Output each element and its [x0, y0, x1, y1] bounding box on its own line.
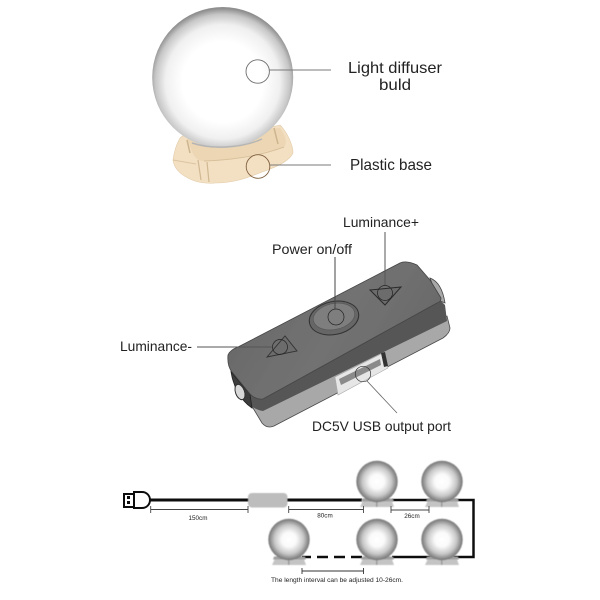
- label: DC5V USB output port: DC5V USB output port: [312, 418, 451, 434]
- label: Plastic base: Plastic base: [350, 157, 432, 174]
- wiring diagram: [124, 461, 474, 584]
- label: Luminance+: Luminance+: [343, 214, 419, 230]
- note: length interval: The length interval can be adjusted 10-26cm.: [271, 577, 403, 584]
- label: Light diffuser bulb: [348, 60, 443, 94]
- inline controller: [248, 493, 288, 508]
- dimension: adjustable interval: [302, 568, 364, 574]
- dimension: 26cm: [391, 506, 429, 520]
- label: Light diffuser bulb: buld: [379, 77, 411, 94]
- bulb 5: [268, 519, 310, 565]
- callout: luminance minus: [197, 340, 288, 354]
- dimension: 80cm: 80cm: [317, 512, 333, 520]
- right end connector: [430, 278, 445, 303]
- USB plug: [124, 492, 150, 508]
- plastic base: [173, 125, 293, 183]
- light diffuser bulb: [152, 7, 293, 148]
- cable: [150, 500, 474, 557]
- bulb 1: [356, 461, 398, 507]
- dark mid band: [228, 298, 447, 411]
- left end connector: [231, 372, 252, 408]
- icon: globe bulb with plastic base: [152, 7, 293, 183]
- label: Light diffuser bulb: Light diffuser: [348, 60, 443, 77]
- top face: [228, 262, 441, 399]
- callout: luminance plus: [378, 232, 392, 300]
- dimension: 150cm: 150cm: [189, 515, 207, 522]
- label: Luminance-: Luminance-: [120, 338, 192, 354]
- dimension: 150cm: [151, 506, 248, 522]
- USB port: [335, 352, 388, 395]
- callout: plastic base: [246, 155, 331, 178]
- label: Power on/off: Power on/off: [272, 241, 352, 257]
- luminance plus button: [370, 287, 401, 305]
- luminance minus button: [267, 336, 297, 357]
- icon: control box: [228, 262, 450, 427]
- callout: light diffuser bulb: [246, 60, 331, 83]
- callout: power on/off: [328, 257, 344, 325]
- lower silver shell: [250, 316, 450, 427]
- power button: [306, 297, 362, 339]
- bulb 2: [421, 461, 463, 507]
- bulb 4: [356, 519, 398, 565]
- dimension: 80cm: [289, 506, 364, 520]
- bulb 3: [421, 519, 463, 565]
- dimension: 26cm: 26cm: [404, 513, 420, 520]
- callout: USB output port: [355, 366, 397, 413]
